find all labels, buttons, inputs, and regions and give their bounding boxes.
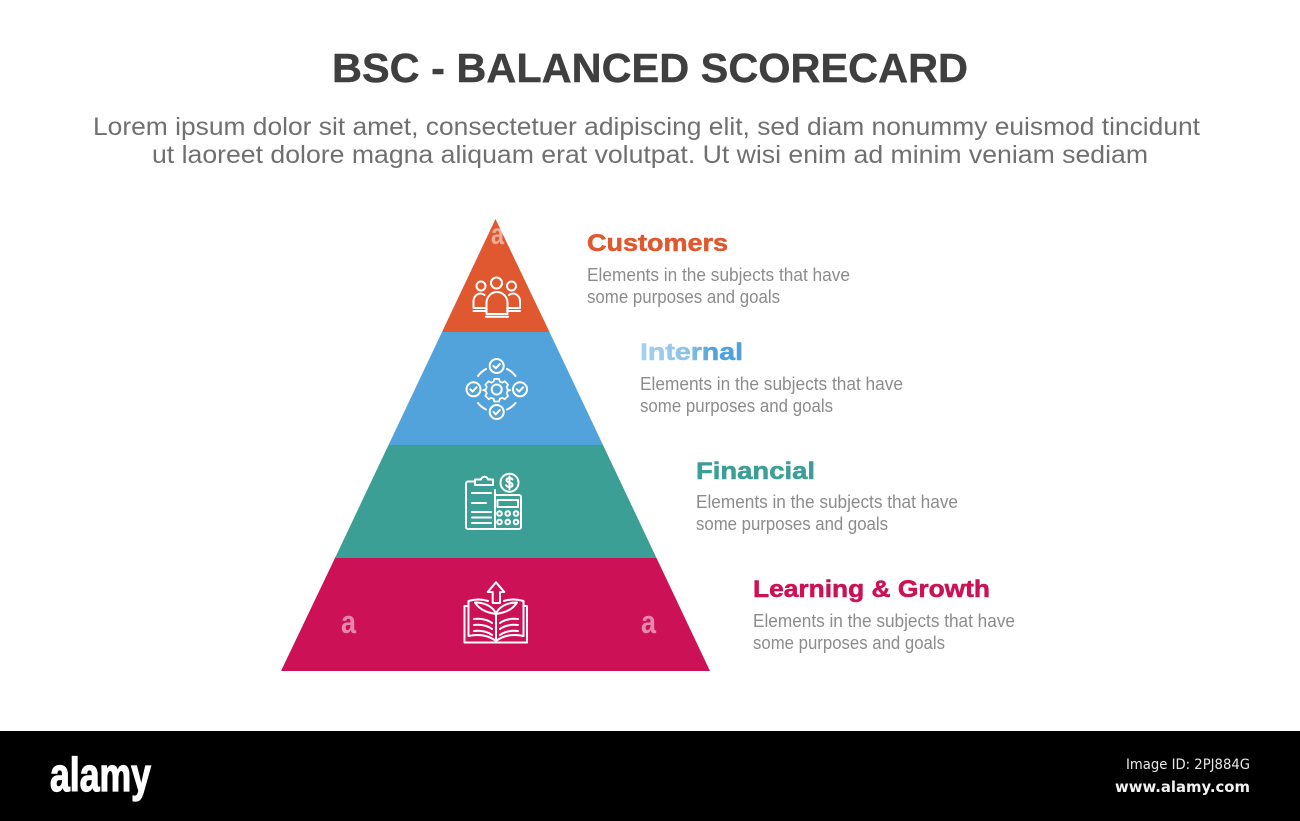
- pyramid tier: learning and growth: [281, 558, 710, 671]
- footer bar: [0, 731, 1300, 821]
- heading: financial: Financial: [696, 458, 815, 485]
- icon: open book with plant and arrow: [464, 582, 527, 642]
- heading: customers: Customers: [587, 230, 728, 257]
- heading: learning and growth: Learning & Growth: [753, 576, 990, 603]
- title: BSC - BALANCED SCORECARD: [332, 45, 968, 91]
- panel: customers: [587, 230, 850, 307]
- text block: learning and growth description: [753, 611, 1015, 653]
- text block: learning and growth description: Elements in the subjects that have: [753, 611, 1015, 631]
- panel: learning and growth: [753, 576, 1015, 653]
- icon: clipboard calculator and dollar: [466, 474, 521, 529]
- text block: financial description: Elements in the subjects that have: [696, 492, 958, 512]
- text block: financial description: [696, 492, 958, 534]
- subtitle text block: ut laoreet dolore magna aliquam erat volutpat. Ut wisi enim ad minim veniam sediam: [152, 141, 1148, 169]
- watermark letter top: a: [491, 218, 504, 251]
- pyramid chart: [281, 218, 710, 671]
- heading: internal: Internal: [640, 339, 743, 366]
- panel: financial: [696, 458, 958, 534]
- subtitle text block: Lorem ipsum dolor sit amet, consectetuer adipiscing elit, sed diam nonummy euismod tincidunt: [93, 113, 1200, 141]
- pyramid tier: financial: [335, 445, 656, 558]
- icon: customers group: [473, 278, 520, 317]
- pyramid tier: customers: [442, 219, 550, 332]
- logo: alamy: alamy: [50, 748, 151, 801]
- subtitle text block: [93, 113, 1200, 169]
- text block: learning and growth description: some purposes and goals: [753, 633, 945, 653]
- panel: internal: [640, 339, 903, 416]
- pyramid tier: internal: [388, 332, 603, 445]
- image id: Image ID: 2PJ884G: [1126, 757, 1250, 773]
- text block: customers description: [587, 265, 850, 307]
- text block: internal description: Elements in the subjects that have: [640, 374, 903, 394]
- text block: customers description: Elements in the subjects that have: [587, 265, 850, 285]
- text block: internal description: [640, 374, 903, 416]
- watermark letter right: a: [641, 604, 656, 640]
- text block: customers description: some purposes and goals: [587, 287, 780, 307]
- text block: internal description: some purposes and goals: [640, 396, 833, 416]
- website url: www.alamy.com: [1115, 778, 1250, 796]
- icon: gear process with checks: [466, 359, 527, 419]
- watermark letter left: a: [341, 604, 356, 640]
- text block: financial description: some purposes and goals: [696, 514, 888, 534]
